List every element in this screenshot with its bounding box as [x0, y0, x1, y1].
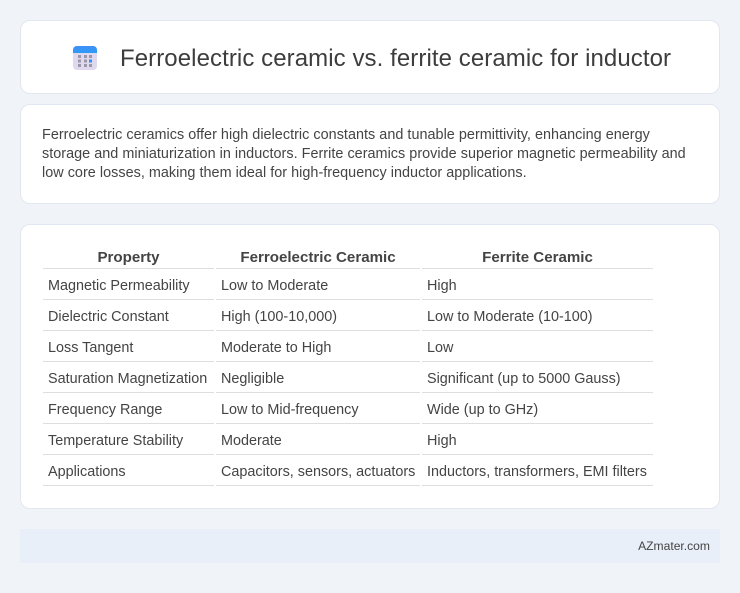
footer brand: AZmater.com [638, 539, 710, 553]
row: Saturation Magnetization [43, 371, 653, 393]
row: Magnetic Permeability: Low to Moderate [221, 278, 328, 294]
title: Ferroelectric ceramic vs. ferrite ceramic for inductor [120, 45, 671, 72]
panel: summary [20, 104, 720, 204]
row: Applications [43, 464, 653, 486]
row: Magnetic Permeability: High [427, 278, 457, 294]
row: Frequency Range: Frequency Range [48, 402, 162, 418]
row: Frequency Range: Wide (up to GHz) [427, 402, 538, 418]
row: Saturation Magnetization: Saturation Magnetization [48, 371, 207, 387]
row: Magnetic Permeability [43, 278, 653, 300]
row: Temperature Stability: Temperature Stability [48, 433, 183, 449]
row: Dielectric Constant [43, 309, 653, 331]
row: Applications: Capacitors, sensors, actuators [221, 464, 415, 480]
row: Frequency Range [43, 402, 653, 424]
row: Applications: Applications [48, 464, 126, 480]
summary text [42, 127, 686, 181]
row: Saturation Magnetization: Significant (up to 5000 Gauss) [427, 371, 621, 387]
row: Saturation Magnetization: Negligible [221, 371, 284, 387]
panel: comparison table [20, 224, 720, 509]
footer bar [20, 529, 720, 563]
summary text: Ferroelectric ceramics offer high dielectric constants and tunable permittivity, enhancing energy [42, 127, 650, 143]
summary text: low core losses, making them ideal for high-frequency inductor applications. [42, 165, 527, 181]
panel: title card [20, 20, 720, 94]
row: Temperature Stability [43, 433, 653, 455]
summary text: storage and miniaturization in inductors. Ferrite ceramics provide superior magnetic permeability and [42, 146, 686, 162]
table header: Property [97, 249, 160, 266]
row: Loss Tangent: Low [427, 340, 453, 356]
table header [43, 249, 653, 269]
row: Frequency Range: Low to Mid-frequency [221, 402, 359, 418]
table header: Ferrite Ceramic [482, 249, 593, 266]
row: Loss Tangent: Moderate to High [221, 340, 331, 356]
row: Dielectric Constant: Low to Moderate (10-100) [427, 309, 593, 325]
row: Magnetic Permeability: Magnetic Permeability [48, 278, 190, 294]
table header: Ferroelectric Ceramic [240, 249, 396, 266]
row: Dielectric Constant: High (100-10,000) [221, 309, 337, 325]
row: Loss Tangent: Loss Tangent [48, 340, 133, 356]
row: Applications: Inductors, transformers, EMI filters [427, 464, 647, 480]
row: Temperature Stability: High [427, 433, 457, 449]
row: Dielectric Constant: Dielectric Constant [48, 309, 169, 325]
icon: calendar [73, 46, 97, 70]
row: Temperature Stability: Moderate [221, 433, 282, 449]
row: Loss Tangent [43, 340, 653, 362]
